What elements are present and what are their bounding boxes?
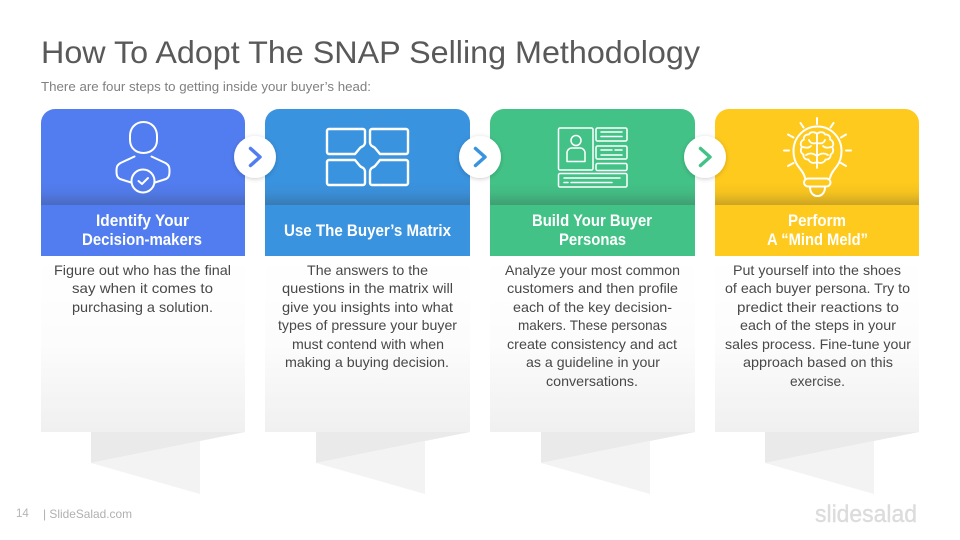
heading: step 3: Personas (559, 231, 626, 249)
text: step 1: purchasing a solution. (72, 299, 213, 315)
text: step 1: say when it comes to (72, 280, 213, 296)
text: step 4: predict their reactions to (737, 299, 899, 315)
arrow: step 3 to 4 (684, 136, 726, 178)
icon: brain in light bulb (784, 118, 851, 196)
header: step 2 (265, 109, 470, 256)
heading: step 1: Decision-makers (82, 231, 202, 249)
text: step 3: customers and then profile (507, 280, 678, 296)
heading: step 3: Build Your Buyer (532, 212, 653, 230)
ribbon: step 3 (541, 432, 695, 494)
text: step 2: types of pressure your buyer (278, 317, 457, 333)
text: step 2: give you insights into what (282, 299, 453, 315)
text: step 3: makers. These personas (518, 317, 667, 333)
text: step 2: must contend with when (292, 336, 444, 352)
panel: use the buyer's matrix (265, 109, 470, 494)
text: step 3: each of the key decision- (513, 299, 672, 315)
text: step 4: sales process. Fine-tune your (725, 336, 911, 352)
logo wordmark: slidesalad (815, 501, 917, 528)
text: step 4: of each buyer persona. Try to (725, 280, 910, 296)
page number: 14 (16, 508, 29, 520)
arrow: step 2 to 3 (459, 136, 501, 178)
heading: step 4 (767, 212, 868, 249)
text: step 3: Analyze your most common (505, 262, 680, 278)
text: step 4: exercise. (790, 373, 845, 389)
ribbon: step 4 (765, 432, 919, 494)
card body: step 3 (490, 256, 695, 432)
text: step 3 (505, 262, 680, 389)
heading: step 1 (82, 212, 202, 249)
card body: step 2 (265, 256, 470, 432)
text: step 4: approach based on this (743, 354, 893, 370)
heading: step 4: A “Mind Meld” (767, 231, 868, 249)
text: step 3: as a guideline in your (526, 354, 660, 370)
arrow: step 1 to 2 (234, 136, 276, 178)
text: step 1: Figure out who has the final (54, 262, 231, 278)
text: step 3: create consistency and act (507, 336, 677, 352)
text: step 1 (54, 262, 231, 315)
text: step 4: Put yourself into the shoes (733, 262, 901, 278)
heading: step 3 (532, 212, 653, 249)
ribbon: step 1 (91, 432, 245, 494)
title: How To Adopt The SNAP Selling Methodology (41, 34, 700, 70)
ribbon: step 2 (316, 432, 470, 494)
card body: step 1 (41, 256, 245, 432)
heading: step 2: Use The Buyer’s Matrix (284, 222, 452, 240)
icon: persona profile (558, 128, 627, 187)
text: step 2: making a buying decision. (285, 354, 449, 370)
heading: step 4: Perform (788, 212, 846, 230)
text: step 2: questions in the matrix will (282, 280, 453, 296)
panel: build your buyer personas (490, 109, 695, 494)
panel: identify your decision-makers (41, 109, 245, 494)
footer source: | SlideSalad.com (43, 507, 132, 521)
text: step 2 (278, 262, 457, 370)
panel: perform a mind meld (715, 109, 919, 494)
card body: step 4 (715, 256, 919, 432)
header: step 3 (490, 109, 695, 256)
header: step 4 (715, 109, 919, 256)
text: step 3: conversations. (546, 373, 638, 389)
text: step 4 (725, 262, 911, 389)
icon: person with check (116, 122, 170, 192)
header: step 1 (41, 109, 245, 256)
subtitle: There are four steps to getting inside your buyer’s head: (41, 80, 371, 94)
heading: step 1: Identify Your (96, 212, 190, 230)
icon: matrix (327, 129, 408, 185)
text: step 2: The answers to the (307, 262, 428, 278)
text: step 4: each of the steps in your (740, 317, 896, 333)
